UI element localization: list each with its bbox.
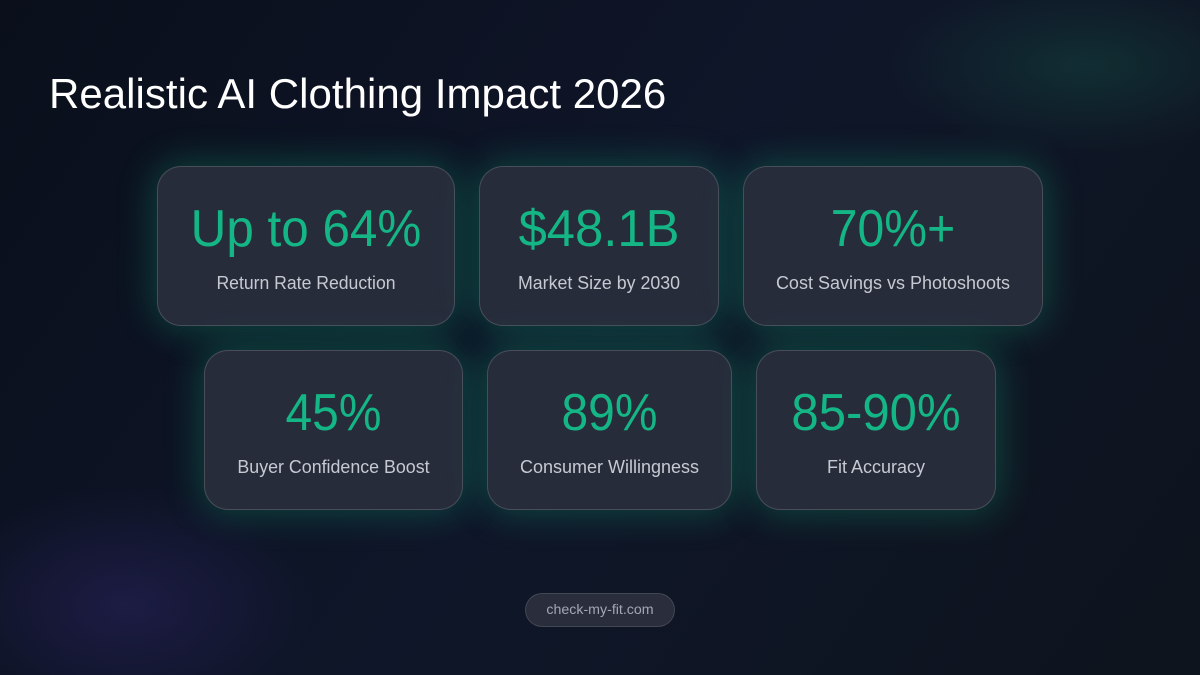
card: fit accuracy — [756, 350, 996, 510]
card: cost savings — [743, 166, 1043, 326]
card: consumer willingness: Consumer Willingness — [520, 457, 699, 477]
card: return rate reduction: Up to 64% — [191, 200, 421, 258]
card: cost savings: 70%+ — [831, 200, 955, 258]
card: market size: Market Size by 2030 — [518, 273, 680, 293]
card: market size: $48.1B — [519, 200, 679, 258]
card: market size — [479, 166, 719, 326]
card: consumer willingness: 89% — [562, 384, 657, 442]
website pill: check-my-fit.com — [546, 602, 654, 618]
card: fit accuracy: 85-90% — [791, 384, 961, 442]
card: cost savings: Cost Savings vs Photoshoots — [776, 273, 1010, 293]
card: buyer confidence: 45% — [286, 384, 381, 442]
card: buyer confidence — [204, 350, 463, 510]
card: fit accuracy: Fit Accuracy — [827, 457, 925, 477]
card: return rate reduction — [157, 166, 455, 326]
card: consumer willingness — [487, 350, 732, 510]
card: return rate reduction: Return Rate Reduction — [216, 273, 396, 293]
title: Realistic AI Clothing Impact 2026 — [49, 70, 666, 117]
website pill — [525, 593, 675, 627]
card: buyer confidence: Buyer Confidence Boost — [237, 457, 430, 477]
